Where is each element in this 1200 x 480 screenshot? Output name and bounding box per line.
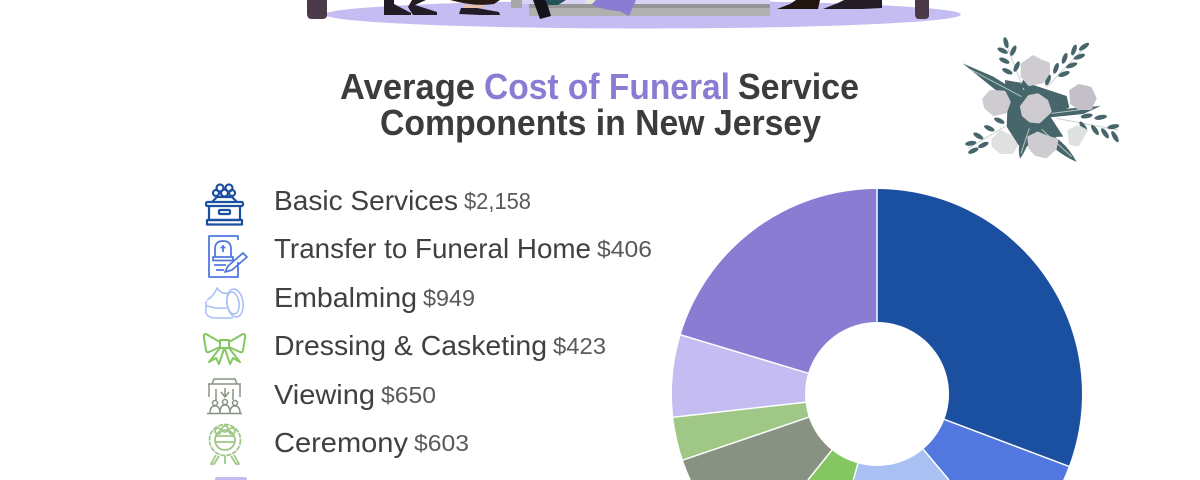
icon: green bow xyxy=(204,334,245,364)
slice: embalming xyxy=(853,449,949,480)
label: ceremony: Ceremony xyxy=(274,427,408,458)
amount: basic services: $2,158 xyxy=(464,188,531,214)
amount: ceremony: $603 xyxy=(414,430,469,456)
slice: transfer xyxy=(923,419,1069,480)
amount: transfer: $406 xyxy=(597,236,652,262)
title: Cost of Funeral xyxy=(484,66,730,107)
label: transfer: Transfer to Funeral Home xyxy=(274,233,591,264)
slice: basic services xyxy=(877,189,1082,466)
slice: purple xyxy=(681,189,877,373)
icon: casket with flowers xyxy=(206,184,243,224)
row: viewing xyxy=(207,379,436,414)
floor ellipse xyxy=(325,0,961,28)
black shoes left pair xyxy=(384,0,437,15)
pale flower fragment xyxy=(585,0,596,4)
label: viewing: Viewing xyxy=(274,379,375,410)
illustration: funeral scene cropped at top xyxy=(307,0,961,28)
right shoes xyxy=(777,0,882,9)
icon: cropped lavender icon at bottom xyxy=(215,477,247,480)
amount: dressing: $423 xyxy=(553,333,606,359)
purple cloth xyxy=(590,0,636,16)
slice: lavender xyxy=(672,335,808,417)
title: Service xyxy=(738,66,859,107)
icon: document with headstone and pen xyxy=(209,236,247,277)
teal bouquet fragment xyxy=(545,0,566,5)
bench leg right xyxy=(915,0,929,19)
row: dressing xyxy=(204,330,606,364)
small shoes xyxy=(450,0,500,15)
row: embalming xyxy=(206,282,475,318)
black ribbon xyxy=(533,0,551,19)
label: embalming: Embalming xyxy=(274,282,417,313)
label: basic services: Basic Services xyxy=(274,185,458,216)
slice: viewing xyxy=(683,417,832,480)
row: transfer xyxy=(209,233,652,277)
donut chart xyxy=(672,189,1082,480)
row: basic services xyxy=(206,184,531,224)
icon: floral bouquet xyxy=(963,37,1120,162)
slice: dressing xyxy=(808,450,858,480)
icon: viewing scene xyxy=(207,379,242,414)
title xyxy=(340,66,859,143)
icon: cream jar xyxy=(206,288,245,318)
title: Average xyxy=(340,66,475,107)
title: Components in New Jersey xyxy=(380,102,821,143)
row: ceremony xyxy=(210,424,469,464)
icon: funeral wreath xyxy=(210,424,240,464)
legend list xyxy=(204,184,652,480)
amount: embalming: $949 xyxy=(423,285,475,311)
slice: ceremony xyxy=(673,402,809,460)
label: dressing: Dressing & Casketing xyxy=(274,330,547,361)
amount: viewing: $650 xyxy=(381,382,436,408)
grey casket stand xyxy=(511,0,770,16)
bench leg left xyxy=(307,0,327,19)
